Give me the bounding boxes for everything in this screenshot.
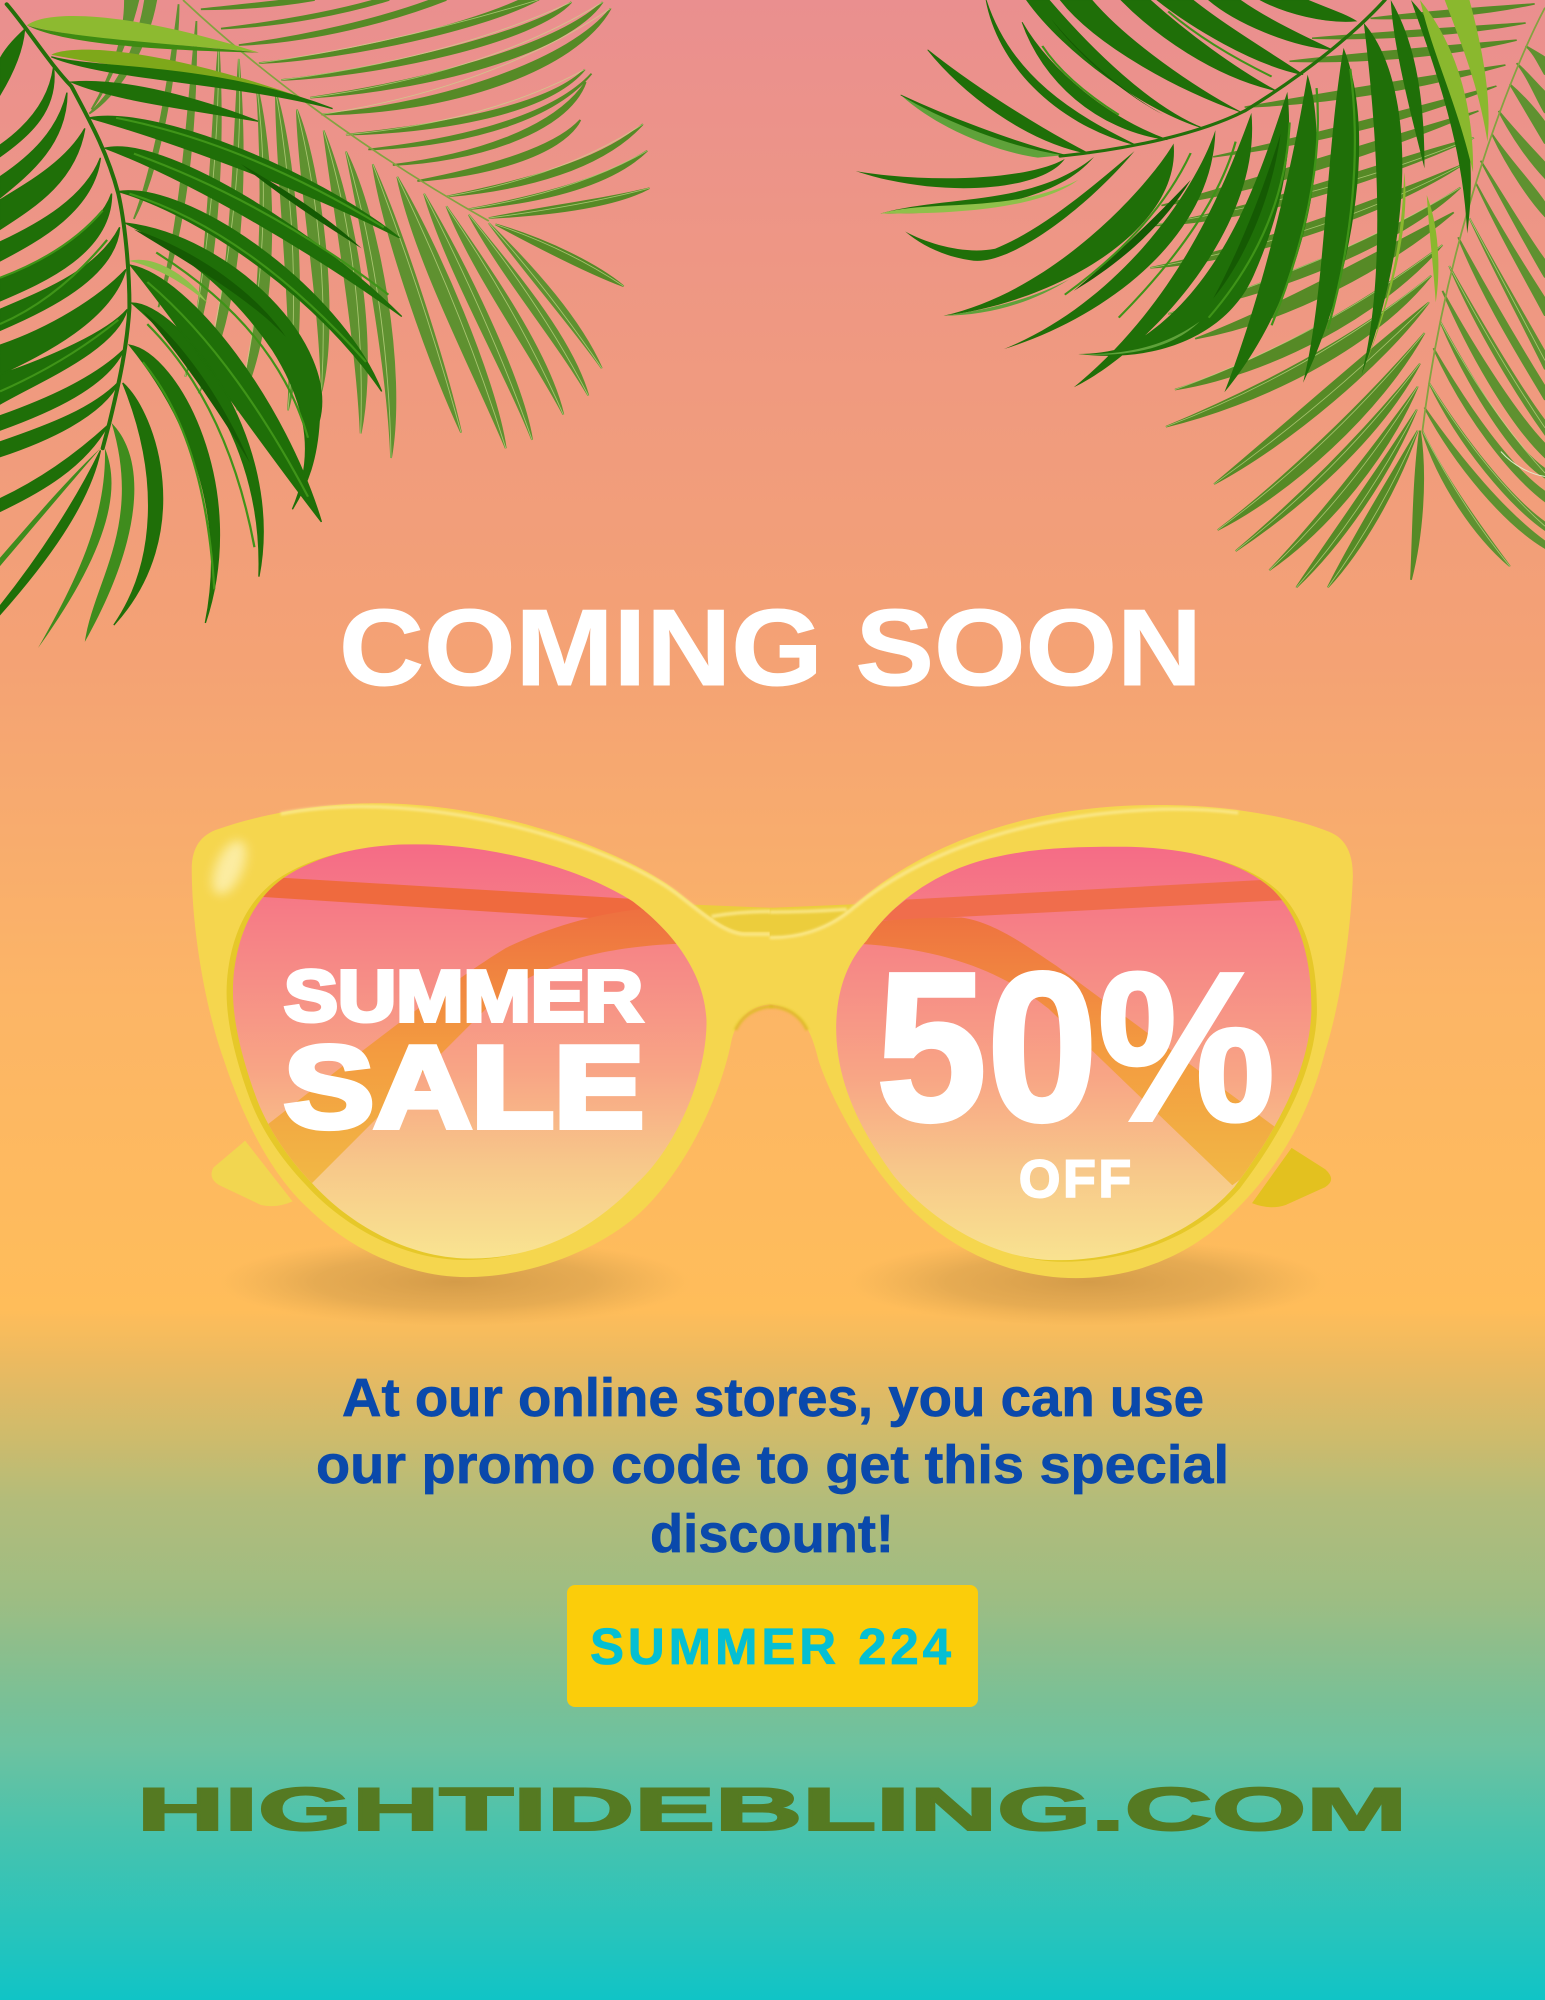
left temple tip — [212, 1141, 293, 1206]
back bridge — [684, 904, 773, 937]
promo code badge: SUMMER 224 — [590, 1618, 952, 1675]
promo code badge — [567, 1585, 978, 1707]
left lens — [210, 841, 724, 1262]
promo description text: At our online stores, you can use — [342, 1368, 1204, 1428]
lens text: SUMMER: SUMMER — [284, 957, 643, 1037]
promo description text: discount! — [650, 1504, 894, 1564]
sunglasses illustration — [192, 803, 1353, 1326]
top-left palm fronds — [0, 0, 650, 648]
right half of glasses — [770, 805, 1353, 1278]
shadow under left lens — [220, 1238, 690, 1326]
promo description text — [316, 1368, 1229, 1564]
promo description text: our promo code to get this special — [316, 1435, 1229, 1495]
left corner gloss — [206, 836, 253, 898]
back bridge — [770, 904, 855, 937]
title: COMING SOON: COMING SOON — [339, 587, 1202, 709]
light palm frond, left — [89, 0, 650, 458]
right lens — [836, 846, 1312, 1260]
left lens rim — [227, 846, 700, 1260]
left frame highlight — [281, 807, 773, 934]
right frame — [770, 805, 1353, 1278]
website URL: HIGHTIDEBLING.COM — [137, 1776, 1407, 1843]
dark palm frond, right — [856, 0, 1489, 392]
lens text: 50%: 50% — [876, 928, 1275, 1165]
dark palm frond, left — [0, 4, 402, 648]
light palm frond, right — [1150, 4, 1545, 587]
lens text: SALE: SALE — [284, 1022, 644, 1152]
shadow under right lens — [850, 1238, 1326, 1326]
right temple tip — [1252, 1148, 1331, 1207]
left frame — [192, 803, 773, 1277]
top-right palm fronds — [856, 0, 1545, 587]
right frame highlight — [770, 809, 1238, 938]
lens text: OFF: OFF — [1019, 1150, 1131, 1209]
right lens rim — [842, 848, 1317, 1262]
left half of glasses — [192, 803, 773, 1277]
